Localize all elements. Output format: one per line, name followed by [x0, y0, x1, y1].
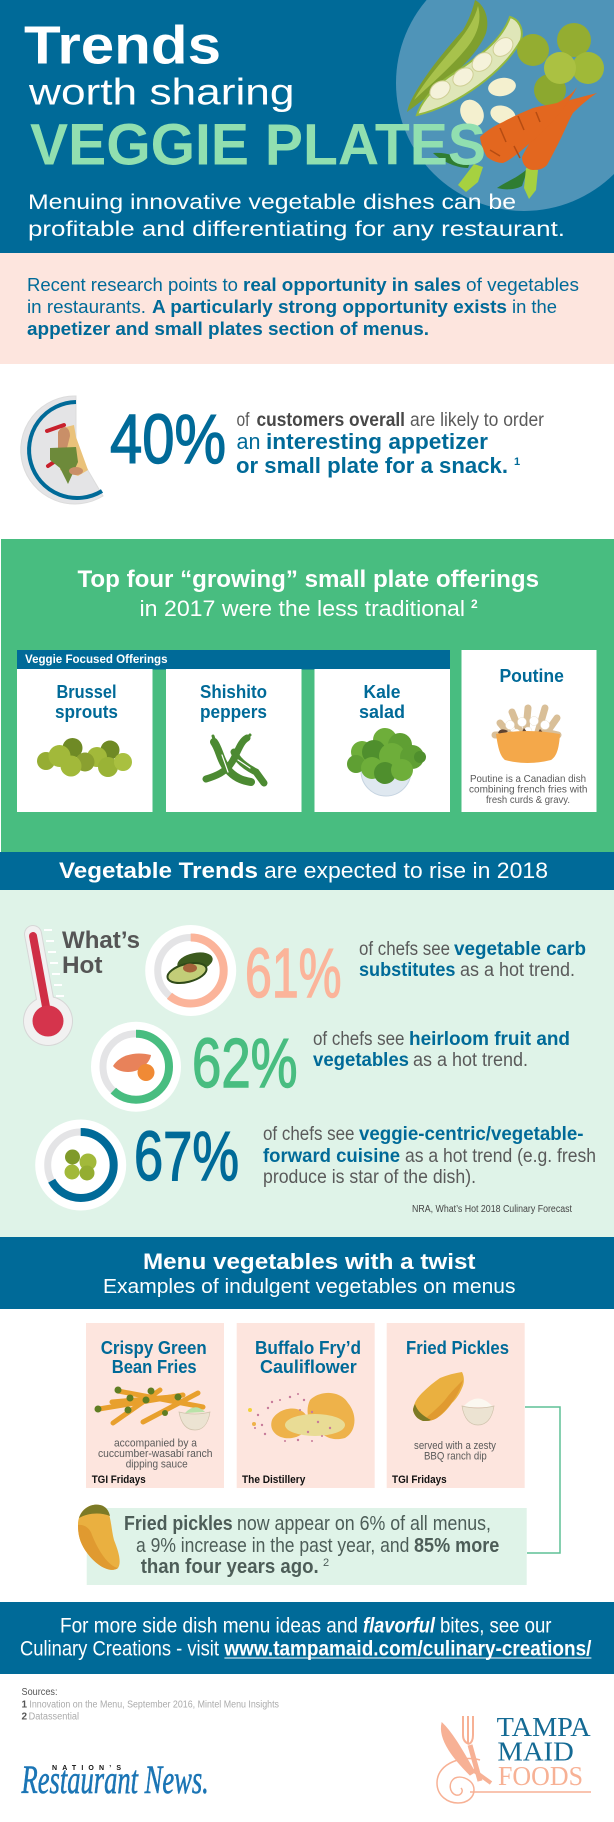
text: 61% description: vegetable carb: [454, 939, 586, 960]
text block: research: real opportunity in sales: [243, 275, 461, 295]
icon: pickle and dip: [413, 1372, 494, 1425]
card: brussel sprouts: sprouts: [55, 702, 118, 722]
logo: Tampa Maid Foods: FOODS: [498, 1761, 583, 1791]
heading: what's hot: [62, 927, 140, 979]
title: worth sharing: worth sharing: [28, 72, 294, 112]
stat row: 62%: [91, 1022, 570, 1112]
card: poutine: Poutine: [499, 666, 564, 686]
text block: research: in restaurants.: [27, 297, 146, 317]
logo: Tampa Maid Foods: TAMPA: [497, 1712, 591, 1742]
text block: 40% description: customers overall: [256, 410, 405, 431]
text: 67% description: veggie-centric/vegetable-: [359, 1124, 584, 1145]
text: poutine description: [469, 773, 588, 806]
heading band: menu vegetables: [0, 1237, 614, 1309]
logo: Nation's Restaurant News: NATION’S: [52, 1765, 121, 1772]
panel: 40 percent stat: [21, 396, 545, 504]
icon: green bean fries: [94, 1386, 210, 1430]
text block: sources: Datassential: [29, 1712, 79, 1723]
text: fact: Fried pickles: [124, 1513, 233, 1535]
panel: call to action: flavorful: [363, 1615, 436, 1638]
text block: sources: Innovation on the Menu, September 2016, Mintel Menu Insights: [29, 1699, 279, 1710]
title: Trends: Trends: [24, 16, 221, 76]
panel: call to action: For more side dish menu ideas and: [60, 1615, 358, 1638]
connector line: [525, 1407, 560, 1553]
subheading: in 2017: in 2017 were the less traditional: [140, 596, 465, 621]
text block: sources: Sources:: [22, 1687, 58, 1698]
card: brussel sprouts: [17, 669, 152, 812]
text block: 40% description: an: [236, 429, 260, 454]
logo: Tampa Maid Foods: [437, 1712, 591, 1803]
text block: 40% description: of: [236, 410, 250, 431]
text: fact: now appear on 6% of all menus,: [237, 1513, 491, 1535]
heading band: menu vegetables: Examples of indulgent vegetables on menus: [103, 1276, 516, 1298]
text: description: BBQ ranch dip: [424, 1451, 487, 1463]
logo: Tampa Maid Foods: MAID: [497, 1737, 574, 1767]
text: description: cuccumber-wasabi ranch: [98, 1448, 212, 1460]
stat: 40%: 40%: [110, 400, 226, 478]
text block: research: A particularly strong opportunity exists: [152, 297, 507, 317]
card: crispy green bean fries: [86, 1323, 224, 1488]
stat: 62%: 62%: [192, 1024, 298, 1102]
icon: knife, fork and swirl: [437, 1716, 591, 1803]
chart: 61% donut: [145, 925, 236, 1016]
logo: Nation's Restaurant News: [21, 1757, 209, 1802]
text: 67% description: produce is star of the dish).: [263, 1167, 476, 1188]
stat row: 61%: [145, 925, 586, 1016]
stat row: 67%: [35, 1117, 596, 1210]
text: description: dipping sauce: [126, 1458, 188, 1470]
panel: call to action: bites, see our: [440, 1615, 552, 1638]
heading band: menu vegetables: Menu vegetables with a twist: [143, 1249, 476, 1274]
panel: top four small plates: [1, 539, 614, 852]
icon: big pickle: [78, 1505, 120, 1570]
subtitle: [28, 191, 565, 241]
icon: peppers: [206, 735, 264, 783]
text block: 40% description: 1: [514, 456, 520, 468]
text: 61% description: substitutes: [359, 960, 456, 981]
card: buffalo fry'd cauliflower: [237, 1323, 375, 1488]
icon: cut plate: [21, 396, 103, 504]
card: kale salad: [314, 669, 450, 812]
card: fried pickles: [387, 1323, 525, 1488]
text: description: [98, 1438, 212, 1470]
text: 67% description: [263, 1124, 596, 1188]
chart: 62% donut: [91, 1022, 181, 1112]
text block: 40% description: interesting appetizer: [266, 429, 488, 454]
panel: call to action: Culinary Creations - visit: [20, 1638, 219, 1661]
text: description: accompanied by a: [114, 1438, 198, 1450]
card: buffalo fry'd cauliflower: Buffalo Fry’d: [255, 1338, 361, 1358]
stat: 67%: 67%: [134, 1117, 239, 1195]
heading band: vegetable trends: Vegetable Trends: [59, 858, 258, 883]
panel: what's hot: [0, 890, 614, 1237]
icon: thermometer: [23, 930, 73, 1046]
text: poutine description: Poutine is a Canadian dish: [470, 773, 586, 785]
title: VEGGIE PLATES: VEGGIE PLATES: [30, 112, 486, 178]
card: shishito peppers: [166, 669, 302, 812]
text: fact: [124, 1513, 499, 1578]
panel: call to action: [0, 1602, 614, 1674]
text: description: served with a zesty: [414, 1440, 496, 1452]
text block: research: in the: [512, 297, 557, 317]
card: fried pickles: Fried Pickles: [406, 1338, 509, 1358]
subheading: in 2017: 2: [471, 597, 478, 611]
panel: research intro: [0, 253, 614, 364]
card: poutine: [462, 650, 596, 812]
heading: what's hot: Hot: [62, 952, 103, 979]
text: 62% description: vegetables: [313, 1050, 409, 1071]
label bar: veggie focused offerings: [17, 650, 450, 670]
text: 67% description: of chefs see: [263, 1124, 354, 1145]
icon: cauliflower: [248, 1393, 354, 1442]
text: fact: 2: [323, 1557, 329, 1569]
text block: sources: [22, 1687, 279, 1723]
text: 67% description: forward cuisine: [263, 1146, 400, 1167]
icon: poutine bowl: [495, 708, 560, 763]
source note: NRA: NRA, What’s Hot 2018 Culinary Forecast: [412, 1204, 572, 1215]
text: 62% description: [313, 1029, 570, 1071]
text: 61% description: [359, 939, 586, 981]
text block: sources: 2: [22, 1712, 28, 1723]
text block: 40% description: or small plate for a snack.: [236, 453, 508, 478]
text: 61% description: as a hot trend.: [460, 960, 575, 981]
icon: plate circle: [396, 0, 614, 211]
label: TGI Fridays: TGI Fridays: [392, 1474, 447, 1486]
text: 62% description: as a hot trend.: [413, 1050, 528, 1071]
label: The Distillery: The Distillery: [242, 1474, 306, 1486]
text: fact: 85% more: [414, 1535, 499, 1557]
chart: 67% donut: [35, 1120, 126, 1210]
logo: Nation's Restaurant News: Restaurant News.: [21, 1757, 209, 1802]
card: crispy green bean fries: Crispy Green: [101, 1338, 207, 1358]
icon: vegetables illustration: [407, 0, 604, 199]
heading band: vegetable trends: [0, 852, 614, 890]
label bar: veggie focused offerings: Veggie Focused Offerings: [25, 654, 168, 666]
text: description: [414, 1440, 496, 1463]
subtitle: Menuing innovative vegetable dishes can be: [28, 191, 516, 214]
text: 61% description: of chefs see: [359, 939, 450, 960]
card: shishito peppers: peppers: [200, 702, 267, 722]
text block: research: appetizer and small plates section of menus.: [27, 319, 429, 339]
callout: fried pickles fact: [78, 1505, 527, 1585]
card: crispy green bean fries: Bean Fries: [112, 1357, 197, 1377]
heading: what's hot: What’s: [62, 927, 140, 954]
text block: research: Recent research points to: [27, 275, 238, 295]
text: 62% description: of chefs see: [313, 1029, 404, 1050]
card: shishito peppers: Shishito: [200, 682, 267, 702]
text: 62% description: heirloom fruit and: [409, 1029, 570, 1050]
icon: sprouts: [37, 738, 132, 777]
card: kale salad: Kale: [364, 682, 400, 702]
text: poutine description: combining french fries with: [469, 784, 588, 796]
text block: 40% description: are likely to order: [410, 410, 545, 431]
text: fact: a 9% increase in the past year, and: [136, 1535, 409, 1557]
panel: header: [0, 0, 614, 253]
stat: 61%: 61%: [245, 934, 342, 1012]
heading: top four: Top four “growing” small plate offerings: [78, 566, 539, 593]
text: poutine description: fresh curds & gravy.: [486, 794, 570, 806]
text block: research: of vegetables: [466, 275, 579, 295]
card: buffalo fry'd cauliflower: Cauliflower: [260, 1357, 357, 1377]
card: kale salad: salad: [359, 702, 405, 722]
text: 67% description: as a hot trend (e.g. fresh: [405, 1146, 596, 1167]
icon: kale bowl: [347, 728, 426, 796]
subtitle: profitable and differentiating for any restaurant.: [28, 218, 565, 241]
text block: sources: 1: [22, 1699, 28, 1710]
label: TGI Fridays: TGI Fridays: [92, 1474, 146, 1486]
text block: research: [27, 275, 579, 339]
text block: 40% description: [236, 410, 545, 478]
text: fact: than four years ago.: [141, 1556, 319, 1578]
heading band: vegetable trends: are expected to rise in 2018: [264, 858, 548, 883]
card: brussel sprouts: Brussel: [56, 682, 116, 702]
